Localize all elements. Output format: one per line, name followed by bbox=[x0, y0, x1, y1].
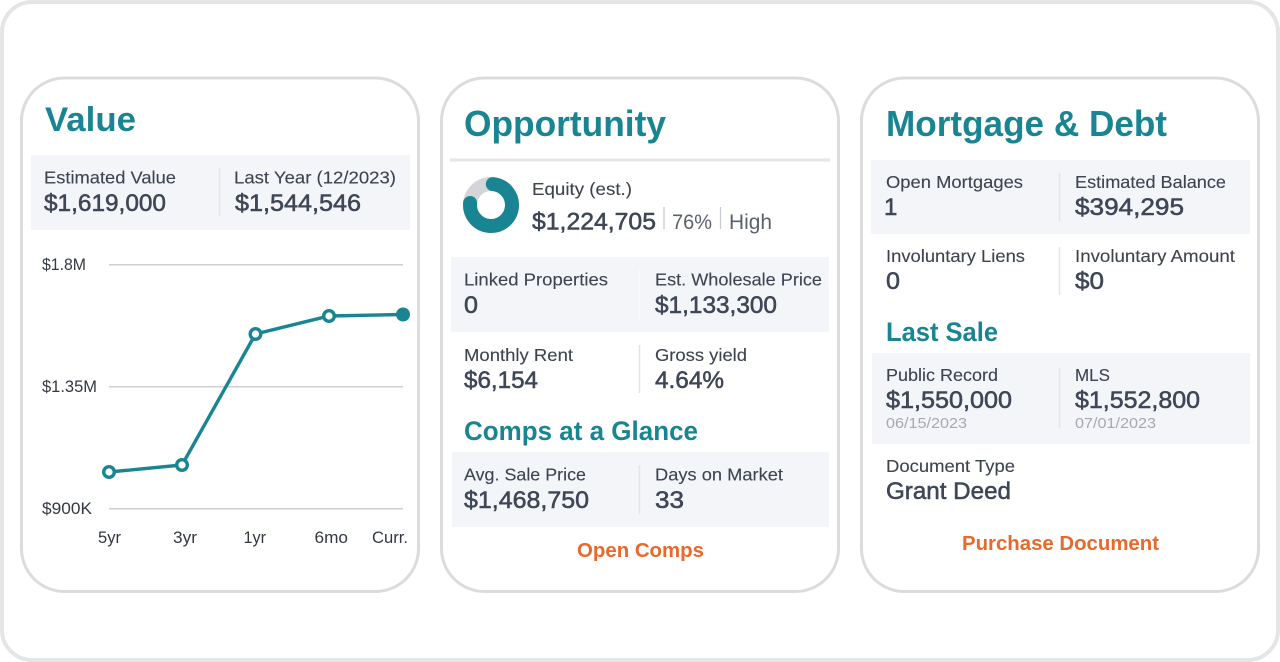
stat band: last sale: $1,552,800 bbox=[1075, 387, 1200, 414]
stat band: mortgages: $394,295 bbox=[1075, 194, 1184, 221]
stat band: last sale: MLS bbox=[1075, 365, 1110, 385]
line chart: value over time: 1yr bbox=[244, 528, 266, 547]
panel: value bbox=[22, 78, 418, 592]
stat: document type bbox=[886, 456, 1015, 505]
stat band: linked properties and wholesale price: 0 bbox=[464, 292, 478, 319]
stat band: linked properties and wholesale price: Est. Wholesale Price bbox=[655, 270, 822, 290]
equity stat: 76% bbox=[672, 211, 712, 234]
stat band: comps: 33 bbox=[655, 487, 684, 514]
stat band: mortgages: 1 bbox=[884, 194, 897, 221]
line chart: value over time: $1.8M bbox=[42, 255, 86, 274]
line chart: value over time: Curr. bbox=[372, 528, 408, 547]
stat band: last sale bbox=[872, 353, 1250, 444]
stat: document type: Grant Deed bbox=[886, 478, 1011, 505]
stats: involuntary liens: 0 bbox=[886, 268, 900, 295]
stat band: estimated value and last year: Estimated Value bbox=[44, 168, 176, 188]
stat band: mortgages bbox=[871, 160, 1250, 234]
stats: involuntary liens bbox=[886, 246, 1235, 295]
stats: rent and yield: 4.64% bbox=[655, 367, 724, 394]
line chart: value over time: 3yr bbox=[173, 528, 197, 547]
stat band: last sale: $1,550,000 bbox=[886, 387, 1012, 414]
stat band: comps bbox=[452, 452, 829, 527]
equity stat: $1,224,705 bbox=[532, 208, 656, 236]
stat band: linked properties and wholesale price bbox=[451, 257, 829, 332]
stat band: estimated value and last year: $1,544,546 bbox=[235, 190, 361, 217]
stats: rent and yield: $6,154 bbox=[464, 367, 538, 394]
stats: involuntary liens: Involuntary Amount bbox=[1075, 246, 1235, 266]
panel: mortgage and debt bbox=[862, 78, 1258, 592]
stat band: linked properties and wholesale price: Linked Properties bbox=[464, 270, 608, 290]
stat band: estimated value and last year: $1,619,000 bbox=[44, 190, 166, 217]
stat band: estimated value and last year: Last Year (12/2023) bbox=[234, 168, 396, 188]
stat band: linked properties and wholesale price: $1,133,300 bbox=[655, 292, 777, 319]
heading: mortgage and debt: Mortgage & Debt bbox=[886, 103, 1167, 144]
stat: document type: Document Type bbox=[886, 456, 1015, 476]
panel: opportunity bbox=[442, 78, 838, 592]
stats: rent and yield bbox=[464, 345, 747, 394]
stat band: comps: Days on Market bbox=[655, 464, 783, 484]
line chart: value over time: $900K bbox=[42, 499, 93, 518]
stat band: comps: $1,468,750 bbox=[464, 487, 589, 514]
stats: rent and yield: Gross yield bbox=[655, 345, 747, 365]
stat band: mortgages: Open Mortgages bbox=[886, 172, 1023, 192]
link: open comps: Open Comps bbox=[577, 539, 704, 562]
line chart: value over time: 6mo bbox=[314, 528, 348, 547]
stat band: last sale: 07/01/2023 bbox=[1075, 415, 1156, 432]
stat band: mortgages: Estimated Balance bbox=[1075, 172, 1226, 192]
stats: involuntary liens: Involuntary Liens bbox=[886, 246, 1025, 266]
heading: last sale: Last Sale bbox=[886, 317, 998, 347]
stat band: comps: Avg. Sale Price bbox=[464, 464, 586, 484]
icon: equity donut bbox=[468, 182, 514, 228]
equity stat: Equity (est.) bbox=[532, 179, 632, 199]
stat band: estimated value and last year bbox=[31, 155, 410, 230]
line chart: value over time: 5yr bbox=[98, 528, 121, 547]
link: purchase document: Purchase Document bbox=[962, 532, 1159, 555]
stat band: last sale: Public Record bbox=[886, 365, 998, 385]
stats: involuntary liens: $0 bbox=[1075, 268, 1104, 295]
heading: opportunity: Opportunity bbox=[464, 103, 666, 144]
equity stat: High bbox=[729, 211, 772, 234]
heading: comps at a glance: Comps at a Glance bbox=[464, 416, 698, 446]
line chart: value over time: $1.35M bbox=[42, 377, 97, 396]
stat band: last sale: 06/15/2023 bbox=[886, 415, 967, 432]
heading: value: Value bbox=[45, 101, 136, 139]
equity stat bbox=[532, 179, 772, 236]
stats: rent and yield: Monthly Rent bbox=[464, 345, 573, 365]
line chart: value over time bbox=[42, 255, 410, 547]
